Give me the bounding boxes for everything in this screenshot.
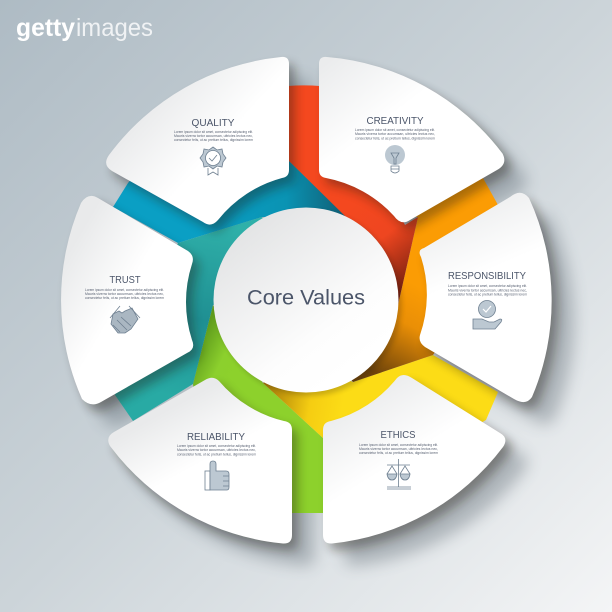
icon: thumbs up: [205, 461, 229, 490]
text block: responsibility: Lorem ipsum dolor sit amet, consectetur adipiscing elit.: [448, 284, 527, 288]
text block: trust: [85, 288, 164, 300]
heading: reliability: RELIABILITY: [187, 431, 245, 443]
icon: light bulb: [385, 145, 405, 173]
text block: reliability: Lorem ipsum dolor sit amet, consectetur adipiscing elit.: [177, 444, 256, 448]
text block: responsibility: consectetur felis, ut ac pretium tellus, dignissim lorem: [448, 292, 527, 296]
text block: reliability: Mauris viverra tortor accumsan, ultricies lectus nec,: [177, 448, 256, 452]
text block: creativity: [355, 128, 435, 140]
text block: trust: consectetur felis, ut ac pretium tellus, dignissim lorem: [85, 296, 164, 300]
icon: handshake: [110, 306, 140, 333]
heading: responsibility: RESPONSIBILITY: [448, 270, 526, 282]
text block: quality: Lorem ipsum dolor sit amet, consectetur adipiscing elit.: [174, 130, 253, 134]
panel: trust: [61, 196, 193, 404]
text block: responsibility: Mauris viverra tortor accumsan, ultricies lectus nec,: [448, 288, 527, 292]
watermark logo: getty: [16, 14, 75, 42]
band: orange: [306, 178, 498, 382]
center hub: [214, 208, 398, 392]
panel: quality: [106, 57, 289, 225]
text block: responsibility: [448, 284, 527, 296]
icon: award badge: [200, 147, 226, 175]
panel: creativity: [319, 57, 504, 222]
icon: balance scale: [387, 459, 411, 489]
panel: ethics: [323, 375, 505, 544]
text block: quality: [174, 130, 253, 142]
icon: hand with check: [473, 300, 502, 329]
watermark: images: images: [76, 14, 153, 42]
heading: creativity: CREATIVITY: [366, 115, 424, 127]
text block: ethics: [359, 443, 438, 455]
petal shadows on ring: [67, 64, 558, 551]
text block: quality: consectetur felis, ut ac pretium tellus, dignissim lorem: [174, 138, 253, 142]
text block: trust: Lorem ipsum dolor sit amet, consectetur adipiscing elit.: [85, 288, 164, 292]
text block: quality: Mauris viverra tortor accumsan, ultricies lectus nec,: [174, 134, 253, 138]
text block: reliability: consectetur felis, ut ac pretium tellus, dignissim lorem: [177, 452, 256, 456]
text block: creativity: Lorem ipsum dolor sit amet, consectetur adipiscing elit.: [355, 128, 435, 132]
text block: ethics: Lorem ipsum dolor sit amet, consectetur adipiscing elit.: [359, 443, 438, 447]
hub label: Core Values: [247, 286, 365, 310]
donut ring: coloured bands: [113, 85, 498, 513]
text block: creativity: consectetur felis, ut ac pretium tellus, dignissim lorem: [355, 136, 435, 140]
text block: reliability: [177, 444, 256, 456]
heading: quality: QUALITY: [192, 117, 234, 129]
hub shadow: [216, 210, 402, 396]
band: green: [193, 305, 323, 513]
watermark logo: [16, 14, 153, 42]
band: blue: [113, 100, 347, 243]
band: teal: [115, 217, 306, 421]
panel: reliability: [108, 378, 292, 544]
panel: responsibility: [420, 193, 552, 402]
heading: ethics: ETHICS: [380, 429, 416, 441]
text block: trust: Mauris viverra tortor accumsan, ultricies lectus nec,: [85, 292, 164, 296]
heading: trust: TRUST: [110, 274, 141, 286]
text block: ethics: Mauris viverra tortor accumsan, ultricies lectus nec,: [359, 447, 438, 451]
text block: ethics: consectetur felis, ut ac pretium tellus, dignissim lorem: [359, 451, 438, 455]
ring shadow on background: [83, 79, 574, 566]
band: yellow: [263, 355, 498, 470]
band: red: [288, 85, 418, 305]
text block: creativity: Mauris viverra tortor accumsan, ultricies lectus nec,: [355, 132, 435, 136]
